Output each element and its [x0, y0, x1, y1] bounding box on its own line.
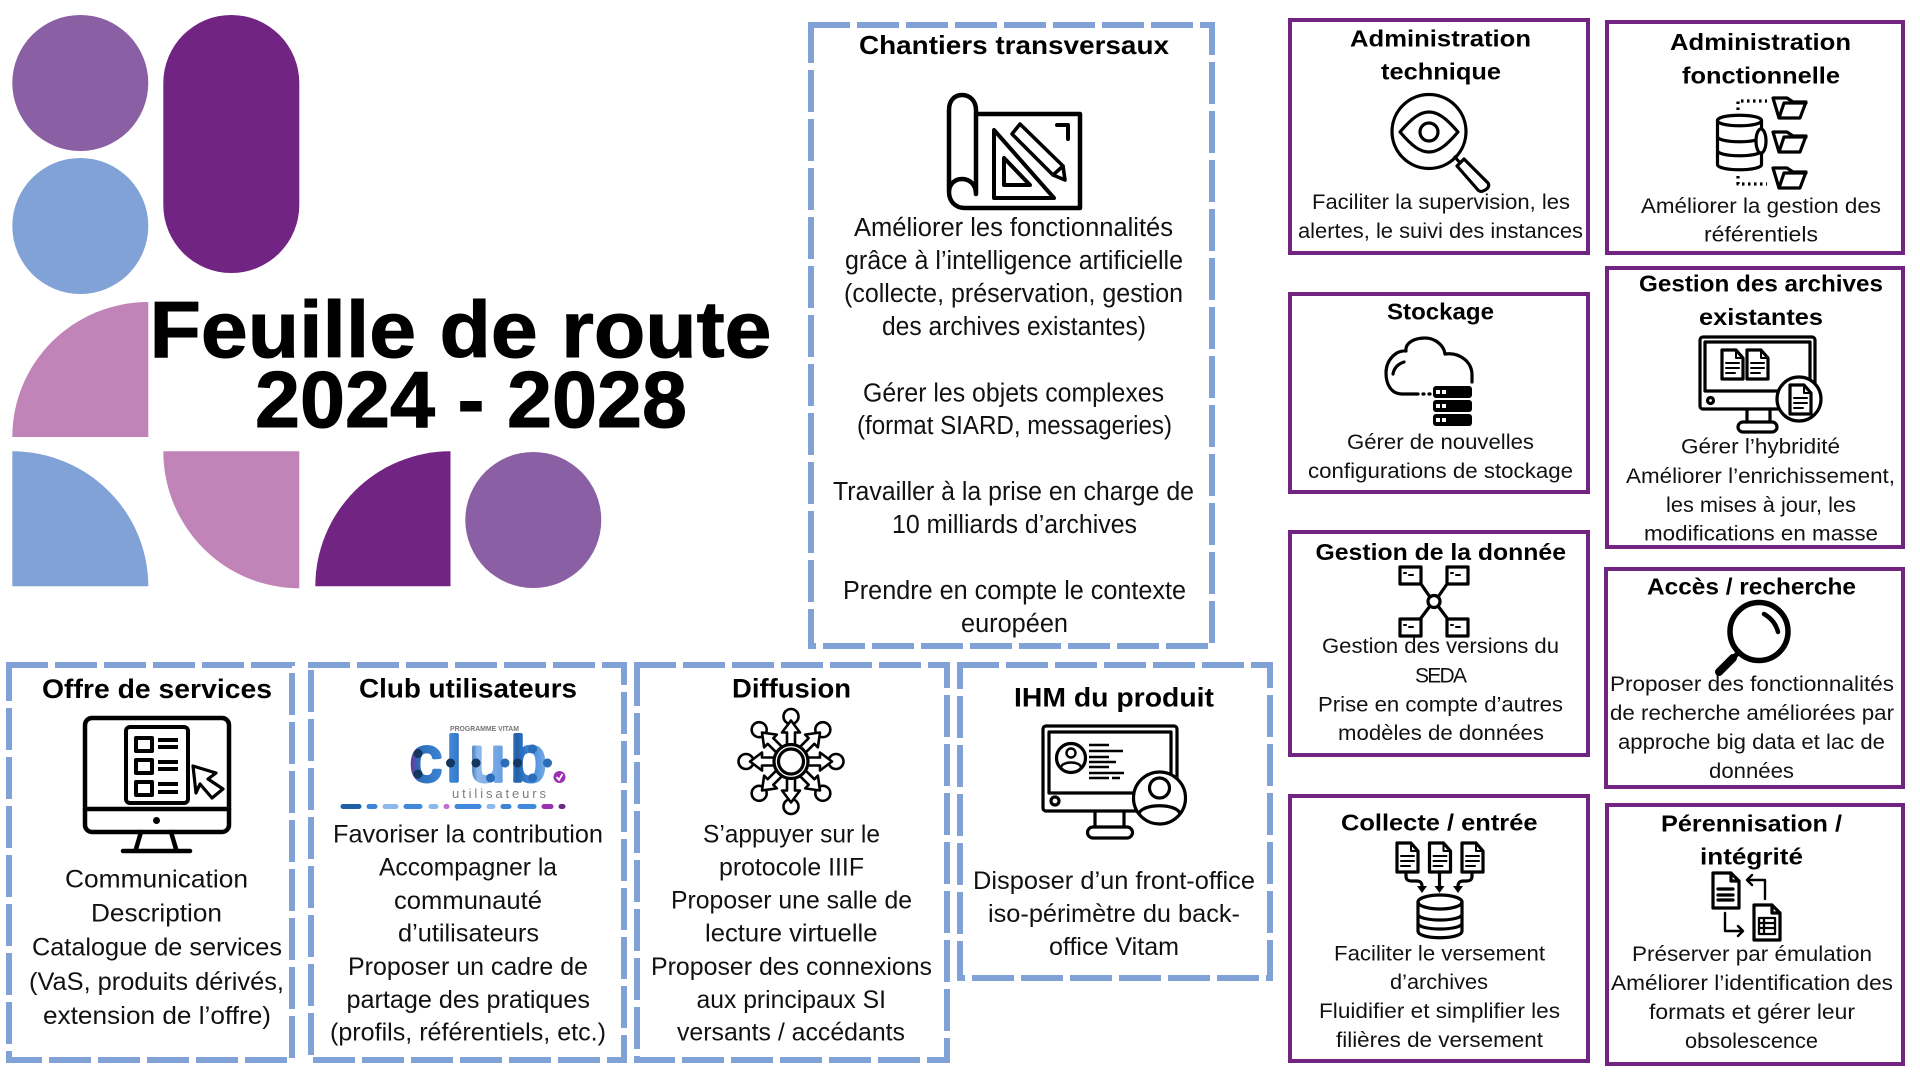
heading: Gestion des archives existantes: existantes: [1699, 304, 1823, 330]
icon: cloud with servers: [1386, 338, 1472, 426]
panel: Offre de services: [6, 665, 292, 1060]
panel: Diffusion: [634, 665, 947, 1060]
text: Collecte description: filières de versement: [1336, 1029, 1543, 1052]
text: Club utilisateurs description: d’utilisateurs: [398, 920, 539, 948]
text: Offre de services description: [29, 866, 284, 1030]
panel: Club utilisateurs: [308, 665, 624, 1060]
panel: Administration fonctionnelle: [1607, 22, 1903, 253]
text: Chantiers objectives: 10 milliards d’archives: [892, 511, 1137, 539]
shape: dark purple pill: [163, 15, 299, 273]
text: Accès / recherche description: de recherche améliorées par: [1610, 702, 1894, 725]
logo: club utilisateurs: [343, 725, 566, 806]
panel: Stockage: [1290, 294, 1588, 492]
text: Chantiers objectives: européen: [961, 610, 1068, 638]
panel: IHM du produit: [957, 665, 1270, 978]
text: Gestion de la donnée description: [1318, 635, 1563, 745]
text: Offre de services description: Description: [91, 900, 222, 928]
text: Pérennisation description: obsolescence: [1685, 1030, 1818, 1053]
icon: data network: [1400, 567, 1468, 636]
text: Stockage description: [1308, 431, 1573, 483]
text: Chantiers objectives: Travailler à la prise en charge de: [833, 478, 1194, 506]
text: Club utilisateurs description: (profils, référentiels, etc.): [330, 1018, 606, 1046]
heading: Diffusion: Diffusion: [732, 674, 851, 704]
text: IHM du produit description: Disposer d’un front-office: [973, 867, 1255, 895]
shape: blue quarter disc: [12, 451, 148, 586]
text: IHM du produit description: [973, 867, 1255, 961]
icon: monitor with documents: [1700, 337, 1821, 432]
text: Collecte description: d’archives: [1390, 971, 1488, 994]
text: Offre de services description: extension de l’offre): [43, 1002, 271, 1030]
text: Club utilisateurs description: Proposer un cadre de: [348, 953, 588, 981]
shape: pink quarter disc: [12, 302, 148, 437]
heading: Administration technique: [1350, 26, 1531, 84]
text: Diffusion description: Proposer une salle de: [671, 886, 912, 914]
shape: blue circle: [12, 158, 148, 294]
heading: Administration fonctionnelle: fonctionnelle: [1682, 62, 1840, 88]
text: Chantiers objectives: Prendre en compte le contexte: [843, 577, 1186, 605]
shape: purple circle lower: [465, 452, 601, 588]
text: Diffusion description: S’appuyer sur le: [703, 820, 880, 848]
text: Administration fonctionnelle description: référentiels: [1704, 224, 1818, 246]
text: Administration technique description: Faciliter la supervision, les: [1312, 191, 1570, 214]
text: Accès / recherche description: [1610, 673, 1894, 783]
text: Gestion de la donnée description: SEDA: [1415, 664, 1467, 688]
text: Accès / recherche description: Proposer des fonctionnalités: [1610, 673, 1894, 696]
heading: Administration fonctionnelle: Administration: [1670, 29, 1851, 55]
icon: monitor with checklist and cursor: [85, 718, 229, 851]
icon: blueprint with set square and pencil: [949, 95, 1080, 208]
text: Administration fonctionnelle description: [1641, 195, 1881, 246]
panel: Pérennisation / intégrité: [1607, 805, 1903, 1064]
heading: Club utilisateurs: Club utilisateurs: [359, 674, 577, 704]
text: Pérennisation description: Améliorer l’identification des: [1611, 972, 1893, 995]
heading: Administration technique: technique: [1381, 58, 1501, 84]
text: IHM du produit description: iso-périmètre du back-: [988, 900, 1240, 928]
text: Administration technique description: [1298, 191, 1583, 243]
text: Gestion de la donnée description: Prise en compte d’autres: [1318, 694, 1563, 716]
panel: Collecte / entrée: [1290, 796, 1588, 1061]
text: Chantiers objectives: des archives existantes): [882, 313, 1146, 341]
text: Diffusion description: [651, 820, 932, 1046]
heading: Gestion des archives existantes: [1639, 270, 1883, 330]
text: Gestion des archives description: Gérer l’hybridité: [1681, 436, 1840, 458]
icon: database with folders: [1718, 98, 1806, 188]
text: Administration technique description: alertes, le suivi des instances: [1298, 220, 1583, 243]
heading: Accès / recherche: Accès / recherche: [1647, 574, 1856, 600]
text: Club utilisateurs description: Accompagner la: [379, 854, 557, 882]
text: IHM du produit description: office Vitam: [1049, 933, 1179, 961]
text: Club utilisateurs description: [330, 820, 606, 1046]
text: Diffusion description: protocole IIIF: [719, 854, 864, 882]
icon: monitor with user profile: [1043, 726, 1186, 838]
text: Administration fonctionnelle description: Améliorer la gestion des: [1641, 195, 1881, 218]
panel: Gestion des archives existantes: [1607, 268, 1903, 547]
heading: IHM du produit: IHM du produit: [1014, 682, 1214, 712]
icon: document conversion arrows: [1713, 873, 1780, 940]
icon: documents flowing into a database: [1397, 843, 1483, 938]
title: Feuille de route: [150, 285, 772, 374]
title: 2024 - 2028: [255, 355, 687, 444]
heading: Administration fonctionnelle: [1670, 29, 1851, 88]
icon: magnifier: [1719, 602, 1788, 672]
heading: Pérennisation / intégrité: [1661, 810, 1843, 870]
text: Diffusion description: Proposer des connexions: [651, 953, 932, 981]
text: Offre de services description: (VaS, produits dérivés,: [29, 968, 284, 996]
logo: club utilisateurs: utilisateurs: [452, 786, 546, 801]
title: [150, 285, 772, 444]
heading: Pérennisation / intégrité: Pérennisation /: [1661, 810, 1843, 836]
shape: pink quarter disc lower: [163, 451, 299, 588]
text: Chantiers objectives: Gérer les objets complexes: [863, 380, 1164, 408]
text: Gestion des archives description: modifications en masse: [1644, 522, 1878, 546]
text: Chantiers objectives: (format SIARD, messageries): [857, 412, 1172, 440]
text: Gestion de la donnée description: Gestion des versions du: [1322, 635, 1559, 658]
heading: Gestion des archives existantes: Gestion des archives: [1639, 270, 1883, 296]
text: Collecte description: Faciliter le versement: [1334, 942, 1545, 966]
text: Diffusion description: versants / accédants: [677, 1018, 905, 1046]
logo: club utilisateurs: club: [410, 725, 546, 795]
text: Diffusion description: lecture virtuelle: [705, 920, 878, 948]
text: Chantiers objectives: [833, 214, 1194, 638]
text: Offre de services description: Catalogue de services: [32, 934, 282, 962]
text: Chantiers objectives: Améliorer les fonctionnalités: [854, 214, 1173, 242]
text: Chantiers objectives: (collecte, préservation, gestion: [844, 280, 1183, 308]
decorative shape group: circles, pill and quarter discs: [12, 15, 601, 588]
panel: Accès / recherche: [1606, 569, 1903, 787]
text: Gestion des archives description: [1626, 436, 1895, 546]
text: Stockage description: Gérer de nouvelles: [1347, 431, 1534, 454]
text: Collecte description: [1319, 942, 1560, 1052]
heading: Chantiers transversaux: Chantiers transversaux: [859, 30, 1170, 60]
text: Gestion de la donnée description: modèles de données: [1338, 722, 1544, 745]
heading: Administration technique: Administration: [1350, 26, 1531, 52]
text: Pérennisation description: formats et gérer leur: [1649, 1001, 1855, 1024]
panel: Gestion de la donnée: [1290, 532, 1588, 755]
logo: club utilisateurs: PROGRAMME VITAM: [450, 726, 519, 733]
text: Collecte description: Fluidifier et simplifier les: [1319, 1000, 1560, 1023]
panel: Chantiers transversaux: [808, 25, 1212, 646]
text: Gestion des archives description: Améliorer l’enrichissement,: [1626, 465, 1895, 488]
text: Club utilisateurs description: partage des pratiques: [346, 986, 590, 1014]
icon: eye in magnifier: [1392, 94, 1489, 191]
shape: purple circle: [12, 15, 148, 151]
text: Pérennisation description: Préserver par émulation: [1632, 943, 1872, 966]
text: Accès / recherche description: approche big data et lac de: [1618, 731, 1885, 754]
text: Gestion des archives description: les mises à jour, les: [1666, 494, 1856, 517]
heading: Stockage: Stockage: [1387, 298, 1494, 324]
heading: Collecte / entrée: Collecte / entrée: [1341, 810, 1538, 836]
text: Stockage description: configurations de stockage: [1308, 460, 1573, 483]
text: Pérennisation description: [1611, 943, 1893, 1053]
icon: radiating arrows hub: [738, 709, 844, 814]
text: Chantiers objectives: grâce à l’intelligence artificielle: [845, 247, 1183, 275]
text: Offre de services description: Communication: [65, 866, 248, 894]
heading: Gestion de la donnée: Gestion de la donnée: [1316, 539, 1566, 565]
text: Diffusion description: aux principaux SI: [696, 986, 886, 1014]
panel: Administration technique: [1290, 20, 1588, 253]
shape: dark purple quarter disc: [315, 451, 450, 586]
text: Club utilisateurs description: communauté: [394, 887, 542, 915]
heading: Pérennisation / intégrité: intégrité: [1700, 844, 1803, 870]
text: Accès / recherche description: données: [1709, 760, 1794, 783]
heading: Offre de services: Offre de services: [42, 674, 272, 704]
text: Club utilisateurs description: Favoriser la contribution: [333, 820, 603, 848]
